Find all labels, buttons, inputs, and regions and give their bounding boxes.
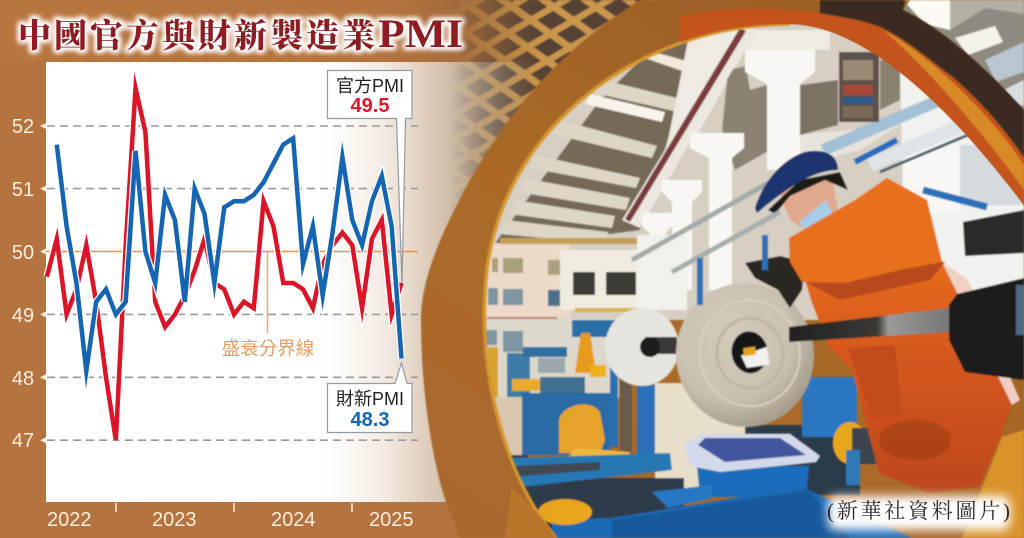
mezzanine block (560, 250, 640, 310)
callout: official PMI (328, 70, 412, 283)
y axis labels: 50 (12, 242, 34, 264)
left foreground orange ring piece (505, 487, 556, 538)
pipes and beams (632, 97, 987, 305)
gold ring sliver (883, 30, 1024, 190)
big brown ring (421, 0, 1024, 538)
recycling bin (697, 466, 809, 497)
ceiling beams (501, 82, 677, 239)
y axis labels: 49 (12, 305, 34, 327)
leader to boom-bust label (266, 252, 268, 333)
x axis year labels (47, 509, 414, 531)
callout: official PMI: 官方PMI (336, 76, 404, 96)
callout: Caixin PMI (328, 363, 412, 432)
wall with windows (480, 243, 570, 321)
chart (12, 70, 418, 531)
dark ceiling bays (722, 66, 770, 170)
title: 中國官方與財新製造業 (18, 17, 375, 55)
blue trough (552, 487, 912, 538)
y axis labels: 51 (12, 179, 34, 201)
hair (768, 172, 848, 214)
second roll (605, 308, 679, 386)
right end machine (949, 278, 1024, 380)
yellow seat (559, 404, 605, 453)
worker apron (802, 262, 1012, 493)
boom-bust label: 盛衰分界線 (222, 338, 314, 359)
x axis year labels: 2023 (152, 509, 196, 531)
worker jacket (790, 200, 932, 258)
diagonal truss (622, 24, 756, 228)
top banner band (0, 0, 640, 62)
white columns (642, 50, 960, 290)
callout: Caixin PMI: 48.3 (351, 409, 389, 431)
callout: official PMI: 49.5 (351, 95, 389, 117)
orange ring crown (680, 8, 1024, 205)
y axis ticks (40, 123, 46, 443)
cap re-draw over pipes (755, 151, 838, 213)
dark ring edge (820, 0, 1024, 157)
y axis labels: 48 (12, 368, 34, 390)
right white interior (900, 67, 1024, 300)
blue table (512, 453, 672, 488)
skylight strips (585, 94, 665, 122)
ring inner rim (484, 24, 790, 538)
y axis labels (12, 116, 34, 452)
signal box (839, 52, 879, 122)
white area right of mezzanine (637, 235, 687, 310)
x axis year labels: 2022 (47, 509, 92, 531)
wire net texture (456, 0, 660, 201)
y axis labels: 52 (12, 116, 34, 138)
y axis labels: 47 (12, 430, 34, 452)
photo caption: (新華社資料圖片) (827, 499, 1010, 523)
top right ceiling beyond ring (880, 0, 1024, 130)
shaft (789, 308, 949, 342)
far right dark block (963, 210, 1024, 256)
main roll (674, 283, 815, 428)
x axis ticks (116, 503, 352, 512)
yellow round part (538, 499, 592, 525)
ceiling base (492, 24, 904, 322)
central ceiling light area (666, 30, 830, 146)
blue machinery behind bin (745, 425, 860, 495)
beige cabinet (655, 383, 747, 488)
navy cap (778, 150, 838, 186)
boom-bust 50 line (46, 250, 418, 252)
blue support column (637, 385, 655, 455)
ceiling bays (495, 42, 688, 244)
yellow motor (833, 422, 867, 464)
factory photo interior (480, 20, 1024, 538)
jacket re-draw over pipes (789, 178, 942, 283)
lower shop background (484, 318, 619, 398)
x axis year labels: 2025 (369, 509, 414, 531)
callout: Caixin PMI: 財新PMI (336, 389, 404, 409)
photo caption glow (828, 496, 1010, 530)
title (18, 11, 463, 56)
official PMI line (red) (47, 88, 402, 440)
x axis year labels: 2024 (271, 509, 316, 531)
shop floor (494, 396, 524, 456)
title: PMI (378, 11, 463, 56)
chart panel background (46, 62, 525, 502)
dark machine base (510, 454, 529, 460)
Caixin PMI line (blue) (57, 138, 402, 371)
background machines (507, 353, 530, 397)
blue machine box (522, 393, 610, 455)
face and mask (780, 179, 838, 228)
grid lines (47, 126, 418, 440)
yellow foreground corner (962, 430, 1024, 538)
glove (745, 256, 805, 308)
